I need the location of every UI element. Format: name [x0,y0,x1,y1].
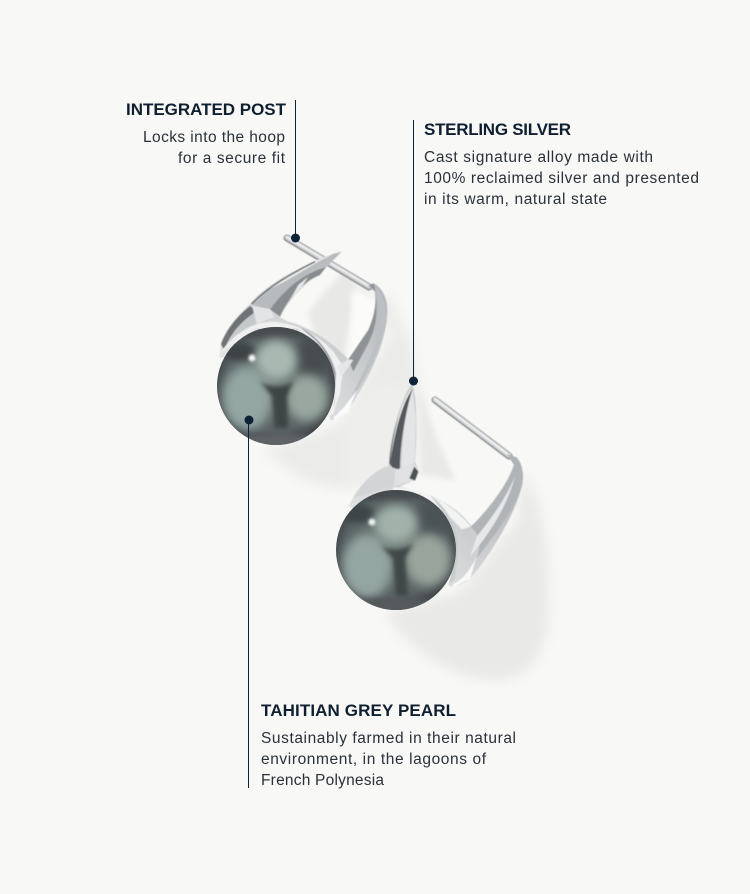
heading: sterling silver: STERLING SILVER [424,120,571,139]
text: tahitian grey pearl description: French Polynesia [261,772,384,789]
callout: tahitian grey pearl [244,416,516,789]
post [435,399,509,456]
text: tahitian grey pearl description [261,730,516,789]
post: integrated post [287,237,369,287]
left earring [217,237,387,454]
text: sterling silver description [424,149,699,208]
leader line and dot: sterling silver [409,120,418,386]
hoop [348,384,523,587]
leader line and dot: tahitian grey pearl [244,416,254,788]
callout: sterling silver [409,120,699,386]
cast shadows of the earrings [262,272,549,680]
text: integrated post description: Locks into the hoop [143,129,285,146]
text: tahitian grey pearl description: Sustainably farmed in their natural [261,730,516,747]
text: sterling silver description: 100% reclaimed silver and presented [424,170,699,187]
pearl [336,484,456,617]
text: integrated post description [143,129,286,167]
leader line and dot: integrated post [291,100,300,242]
text: sterling silver description: in its warm, natural state [424,191,607,208]
heading: integrated post: INTEGRATED POST [126,100,287,119]
text: sterling silver description: Cast signature alloy made with [424,149,653,166]
callout: integrated post [126,100,300,242]
right earring [336,384,523,617]
text: integrated post description: for a secure fit [178,150,286,167]
tahitian grey pearl [217,327,335,445]
heading: tahitian grey pearl: TAHITIAN GREY PEARL [261,701,456,720]
text: tahitian grey pearl description: environment, in the lagoons of [261,751,487,768]
hoop: sterling silver [219,252,387,420]
